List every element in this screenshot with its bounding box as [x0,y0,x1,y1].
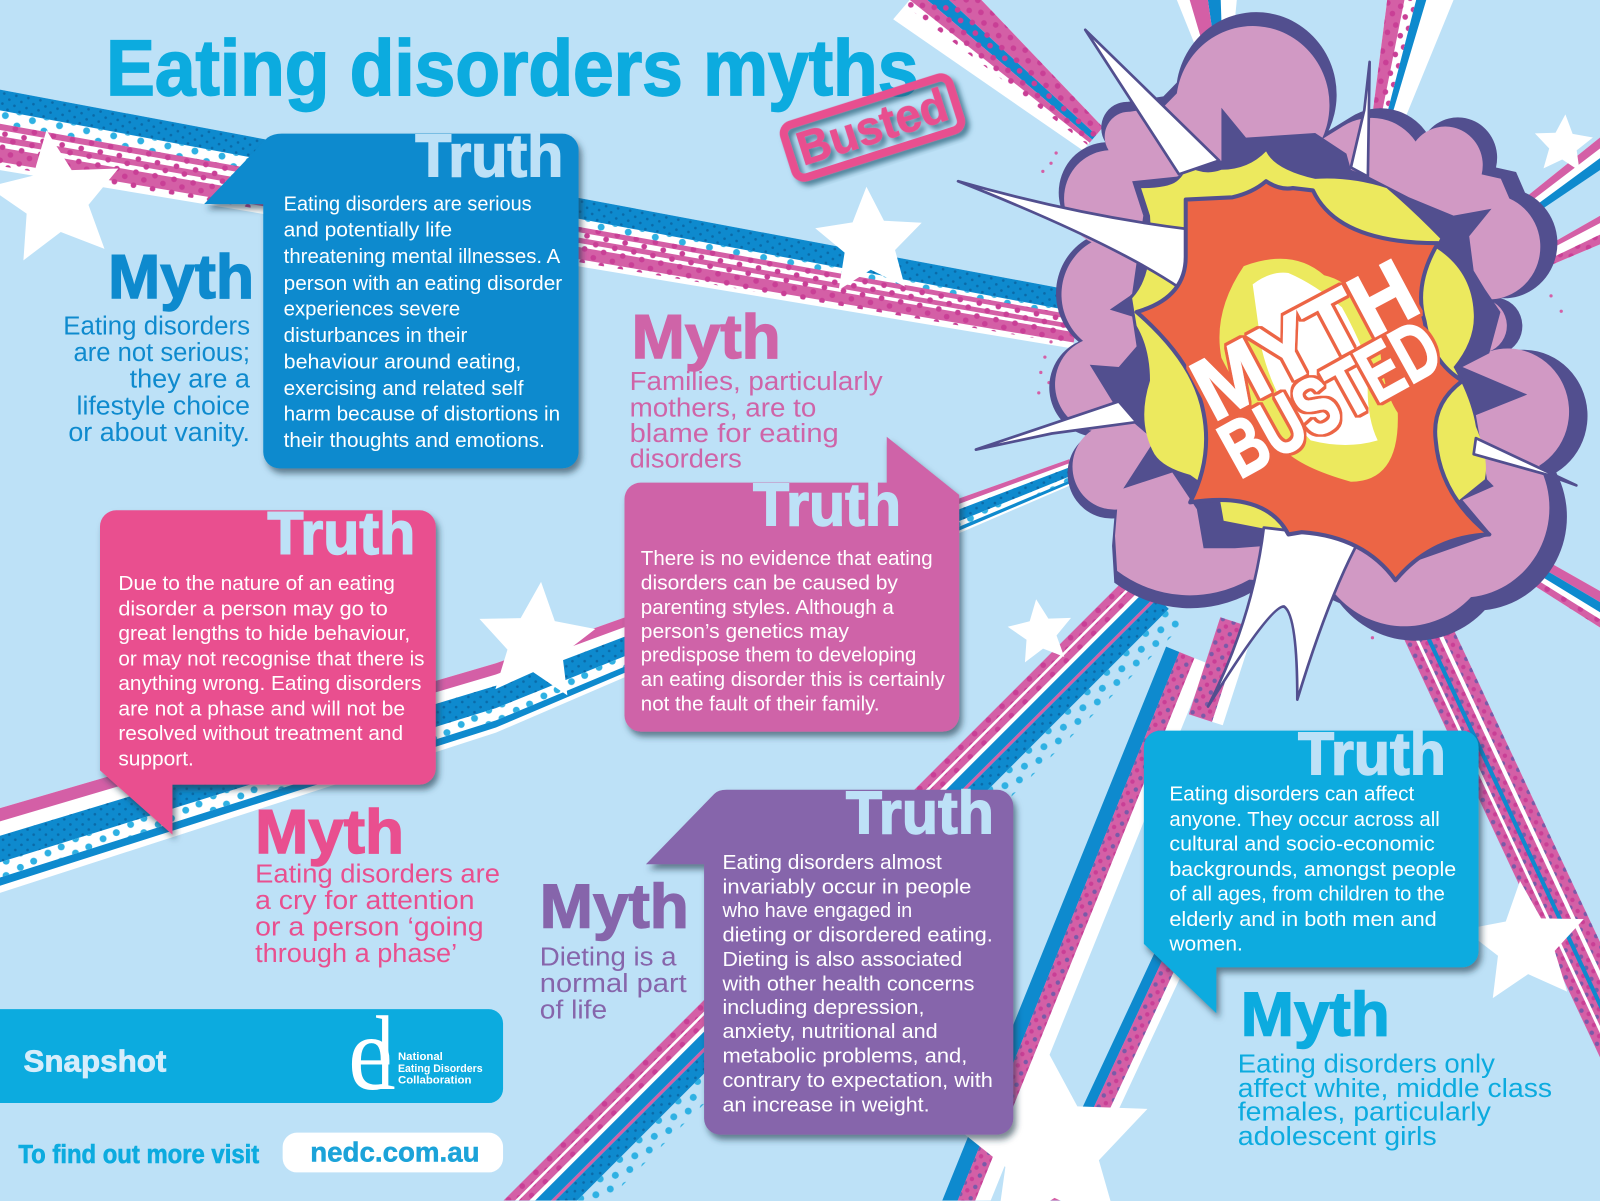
truth body: or may not recognise that there is [118,648,425,670]
myth statement [630,368,883,473]
truth body: cultural and socio-economic [1169,833,1435,855]
truth body [284,194,563,452]
cloud dark outline [1049,12,1588,641]
truth heading: Truth [753,472,901,539]
star: middle left [473,577,599,697]
yellow blast [1132,151,1486,530]
speech bubble [204,134,579,468]
spike: lower left [976,401,1137,450]
myth statement: Dieting is a [540,943,677,971]
myth statement: lifestyle choice [77,392,250,420]
halftone dots around burst [1037,151,1563,639]
spike: top left [1085,30,1219,174]
myth: attention [255,798,500,968]
myth: families [630,303,883,473]
inner dark spiky ring [1090,108,1527,562]
myth statement: a cry for attention [255,887,474,915]
myth statement: mothers, are to [630,394,816,422]
logo: Collaboration [398,1075,471,1087]
truth body: not the fault of their family. [641,694,880,716]
truth body [118,573,425,770]
speech bubble [100,510,436,835]
ray: right upper band one [1517,126,1600,221]
truth body: elderly and in both men and [1169,909,1437,931]
myth heading: Myth [540,873,689,942]
ray: upper left striped band [0,88,1083,371]
myth statement [540,943,687,1024]
myth statement: normal part [540,970,687,998]
truth body: invariably occur in people [722,876,971,898]
truth body: anything wrong. Eating disorders [118,673,421,695]
logo: e [348,994,393,1112]
spike: bottom [1208,528,1360,707]
myth: not serious [63,243,254,447]
truth body: dieting or disordered eating. [722,924,993,946]
star: below burst [1004,595,1076,664]
myth statement: of life [540,996,607,1024]
truth body: backgrounds, amongst people [1169,859,1456,881]
truth body: and potentially life [284,220,452,242]
truth body [1168,783,1456,955]
myth statement: Eating disorders only [1238,1050,1495,1078]
myth statement [255,861,500,968]
truth body: Due to the nature of an eating [118,573,395,595]
ray: lower band toward bottom edge [942,647,1208,1201]
myth statement: Eating disorders are [255,861,500,889]
truth body: women. [1168,933,1243,955]
ray: band above cyan panel [1189,617,1254,725]
panel: truth, dieting [646,780,1013,1135]
truth body: of all ages, from children to the [1169,883,1445,905]
logo: National [398,1051,443,1063]
spike: top right [1351,62,1370,177]
word: BUSTED: BUSTED [1205,302,1455,494]
truth body: anyone. They occur across all [1169,809,1440,831]
truth body: disturbances in their [284,325,468,347]
truth body: who have engaged in [721,900,912,922]
star: upper centre [813,184,925,291]
myth statement: they are a [130,366,251,394]
burst text: myth busted [1176,241,1455,494]
myth: dieting [540,873,689,1024]
truth body: anxiety, nutritional and [722,1021,938,1043]
truth body [641,548,945,716]
truth heading: Truth [415,123,563,190]
bar [0,1009,503,1103]
ray: lower middle diagonal band [504,572,1184,1201]
ray: right upper band two [1539,207,1600,270]
star: bottom [950,1044,1147,1201]
myth heading: Myth [255,798,404,867]
myth statement: affect white, middle class [1238,1075,1552,1103]
myth heading: Myth [1241,981,1390,1050]
truth heading: Truth [846,780,994,847]
spike: right [1474,438,1576,485]
truth heading: Truth [1298,720,1446,787]
ray: lower steep band [1039,733,1287,1201]
truth body: including depression, [722,997,924,1019]
truth body: Dieting is also associated [722,949,962,971]
myth statement [1238,1050,1552,1151]
website pill: nedc.com.au [310,1137,480,1168]
logo: l [374,994,396,1112]
star: upper left [0,121,129,264]
title: Eating disorders myths [106,24,918,112]
panel: truth, attention [100,500,436,835]
truth body: person’s genetics may [641,621,849,643]
myth statement: or about vanity. [68,419,250,447]
truth body [721,852,993,1117]
orange star blast [1137,181,1489,580]
truth body: disorders can be caused by [641,572,898,594]
myth statement: disorders [630,445,742,473]
ray: top centre band [893,0,1118,168]
ray: top band right [1356,0,1455,125]
truth body: Eating disorders can affect [1169,783,1415,805]
truth body: threatening mental illnesses. A [284,246,561,268]
truth body: Eating disorders almost [722,852,942,874]
myth statement: Families, particularly [630,368,883,396]
truth body: There is no evidence that eating [641,548,933,570]
truth body: behaviour around eating, [284,351,521,373]
star: right [1460,876,1590,1000]
centre white blob [1253,273,1378,445]
myth heading: Myth [108,243,254,312]
ray: right lower short band [1512,547,1600,636]
speech bubble [646,790,1013,1135]
truth body: an eating disorder this is certainly [641,669,945,691]
spike: left [958,181,1190,289]
logo: Eating Disorders [398,1063,483,1075]
explosion burst illustration [958,12,1588,707]
truth body: metabolic problems, and, [722,1046,967,1068]
website pill [283,1133,503,1172]
truth body: an increase in weight. [722,1095,930,1117]
truth body: exercising and related self [284,378,524,400]
truth body: contrary to expectation, with [722,1070,993,1092]
footer bar: snapshot [0,994,503,1112]
myth: only white females [1238,981,1552,1151]
myth statement: through a phase’ [255,940,457,968]
truth body: experiences severe [284,298,460,320]
panel: truth, families [624,437,959,732]
myth statement: or a person ‘going [255,914,484,942]
myth statement: Eating disorders [63,313,250,341]
truth heading: Truth [267,500,415,567]
logo [348,994,483,1112]
ray: top band middle [1174,0,1252,83]
myth statement: adolescent girls [1238,1123,1437,1151]
truth body: their thoughts and emotions. [284,430,545,452]
call to action text: To find out more visit [18,1141,260,1169]
centre yellow blob [1219,259,1398,482]
truth body: Eating disorders are serious [284,194,532,216]
truth body: great lengths to hide behaviour, [118,623,410,645]
truth body: support. [118,748,194,770]
panel: truth, anyone [1144,720,1479,1013]
myth heading: Myth [632,303,781,372]
snapshot label: Snapshot [23,1044,166,1078]
star: upper right [1533,112,1594,172]
truth body: predispose them to developing [641,645,916,667]
myth statement: blame for eating [630,420,839,448]
stamp: busted: Busted [790,79,954,175]
ray: lower left striped band [0,459,1069,893]
truth body: are not a phase and will not be [118,698,405,720]
truth body: harm because of distortions in [284,403,560,425]
panel: truth, not serious [204,123,579,468]
word: MYTH: MYTH [1176,241,1433,439]
truth body: with other health concerns [721,973,975,995]
truth body: parenting styles. Although a [641,597,895,619]
truth body: resolved without treatment and [118,723,403,745]
speech bubble [624,437,959,732]
truth body: person with an eating disorder [284,273,563,295]
speech bubble [1144,731,1479,1013]
myth statement: are not serious; [73,339,250,367]
myth statement: females, particularly [1238,1098,1491,1126]
ray: lower right band [1403,617,1600,1201]
truth body: disorder a person may go to [118,598,388,620]
cloud mauve fill [1055,26,1569,626]
myth statement [63,313,251,447]
